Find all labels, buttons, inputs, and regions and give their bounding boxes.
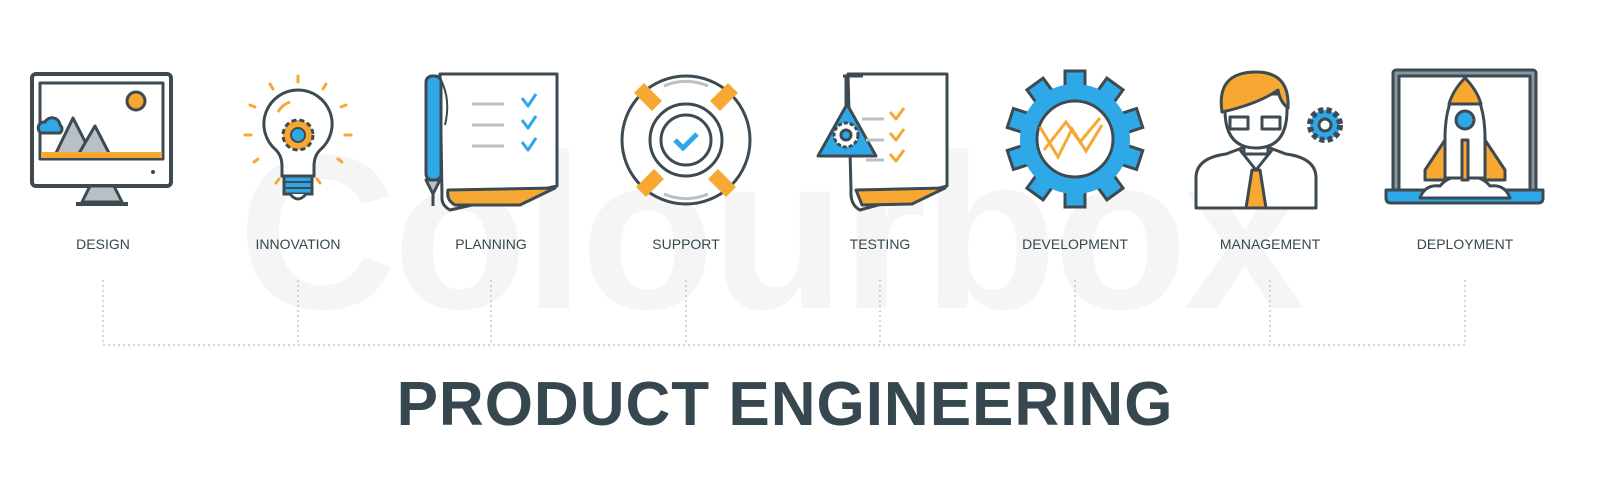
title: PRODUCT ENGINEERING bbox=[397, 370, 1173, 439]
label: deployment: DEPLOYMENT bbox=[1417, 236, 1514, 252]
icon: planning bbox=[426, 74, 557, 210]
label: planning: PLANNING bbox=[455, 236, 527, 252]
label: testing: TESTING bbox=[850, 236, 910, 252]
label: development: DEVELOPMENT bbox=[1022, 236, 1128, 252]
icon: testing bbox=[818, 74, 947, 210]
label: management: MANAGEMENT bbox=[1220, 236, 1321, 252]
label: support: SUPPORT bbox=[652, 236, 720, 252]
icon: development gear bbox=[1007, 71, 1143, 207]
watermark: Colourbox bbox=[238, 109, 1305, 355]
icon: design monitor bbox=[32, 74, 171, 204]
icon: innovation bulb bbox=[245, 76, 351, 199]
icon: support lifebuoy bbox=[622, 76, 750, 204]
icon: management person bbox=[1196, 72, 1340, 208]
connector lines bbox=[103, 280, 1465, 345]
label: design: DESIGN bbox=[76, 236, 130, 252]
icon: deployment laptop rocket bbox=[1386, 70, 1543, 203]
label: innovation: INNOVATION bbox=[255, 236, 341, 252]
